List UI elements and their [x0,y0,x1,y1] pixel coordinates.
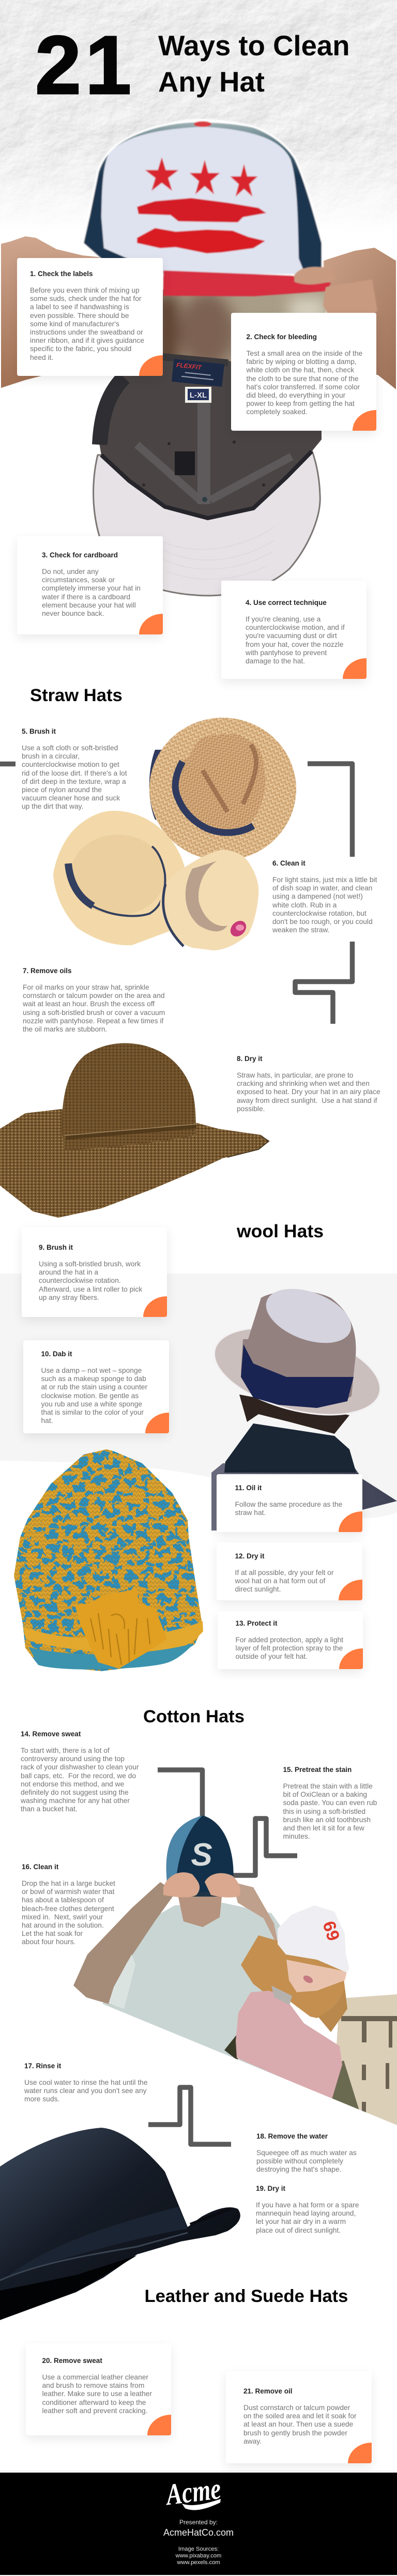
step 17 heading: 17. Rinse it [24,2062,61,2070]
step 5 text: Use a soft cloth or soft-bristled brush in a circular, counterclockwise motion to get rid of the loose dirt. If there's a lot of dirt deep in the texture, wrap a piece of nylon around the vacuum cleaner hose and suck up the dirt that way. [22,744,127,810]
step 6 heading: 6. Clean it [272,859,306,867]
step 19 heading: 19. Dry it [256,2185,285,2192]
step 4 heading: 4. Use correct technique [246,599,327,607]
step 2 text: Test a small area on the inside of the fabric by wiping or blotting a damp, white cloth on the hat, then, check the cloth to be sure that none of the hat's color transferred. If some color did bleed, do everything in your power to keep from getting the hat completely soaked. [246,350,362,416]
card: step 11 [217,1474,362,1532]
step 2 heading: 2. Check for bleeding [246,333,317,341]
photo: woven straw fedora [149,718,296,860]
photo: underside of grey cap with Flexfit label: FLEXFIT [176,361,203,371]
text: step 19 [256,2185,359,2234]
card: step 20 [26,2343,171,2435]
photo: man in blue S cap: S [191,1837,212,1873]
step 16 heading: 16. Clean it [22,1863,58,1871]
step 12 text: If at all possible, dry your felt or wool hat on a hat form out of direct sunlight. [235,1569,333,1593]
title number 21: 21 [35,19,135,111]
step 21 heading: 21. Remove oil [243,2387,293,2395]
step 1 heading: 1. Check the labels [30,270,93,278]
step 8 text: Straw hats, in particular, are prone to cracking and shrinking when wet and then exposed to heat. Dry your hat in an airy place away from direct sunlight. Use a hat stand if possible. [237,1071,380,1113]
step 15 text: Pretreat the stain with a little bit of OxiClean or a baking soda paste. You can even rub this in using a soft-bristled brush like an old toothbrush and then let it sit for a few minutes. [283,1782,377,1840]
background: crumpled paper header [0,0,397,233]
card: step 10 [23,1340,169,1433]
orange corner [353,410,376,431]
step 13 heading: 13. Protect it [236,1619,278,1627]
step 4 text: If you're cleaning, use a counterclockwise motion, and if you're vacuuming dust or dirt from your hat, cover the nozzle with pantyhose to prevent damage to the hat. [246,615,345,665]
photo: black felt hat [0,2128,240,2320]
footer: image sources [176,2546,221,2566]
step 3 text: Do not, under any circumstances, soak or completely immerse your hat in water if there is a cardboard element because your hat will never bounce back. [42,568,141,617]
photo: cream straw hat with pink flower [160,850,258,950]
orange corner [147,2415,171,2435]
heading: Cotton Hats: Cotton Hats [143,1707,245,1726]
orange corner [145,1413,169,1433]
step 1 text: Before you even think of mixing up some suds, check under the hat for a label to see if handwashing is even possible. There should be some kind of manufacturer's instructions under the sweatband or inner ribbon, and if it gives guidance specific to the fabric, you should heed it. [30,286,144,361]
heading: wool Hats: wool Hats [237,1221,324,1241]
background: grey wool section band [0,1274,397,1518]
card: step 21 [226,2371,372,2463]
step 20 text: Use a commercial leather cleaner and brush to remove stains from leather. Make sure to use a leather conditioner afterward to keep the leather soft and prevent cracking. [42,2373,152,2415]
photo: underside of grey cap with Flexfit label: L-XL [190,391,207,400]
footer: image sources: www.pixabay.com [176,2553,221,2559]
step 3 heading: 3. Check for cardboard [42,551,118,559]
heading: Leather and Suede Hats: Leather and Suede Hats [145,2286,348,2306]
text: step 8 [237,1055,380,1113]
card: step 12 [217,1542,362,1600]
orange corner [143,1296,166,1317]
orange corner [139,614,163,634]
title text [158,30,349,98]
step 13 text: For added protection, apply a light layer of felt protection spray to the outside of your felt hat. [236,1636,343,1660]
text: step 17 [24,2062,148,2103]
card: step 9 [22,1227,166,1317]
Acme logo: Acme [163,2472,223,2512]
footer: presented by: Presented by: [179,2519,218,2526]
orange corner [348,2443,372,2463]
step 15 heading: 15. Pretreat the stain [283,1766,352,1774]
photo: man in blue S cap [73,1815,289,2099]
step 18 heading: 18. Remove the water [256,2132,328,2140]
orange corner [343,658,367,679]
title text: Any Hat [158,66,265,98]
photo: pale straw boater [53,811,187,945]
photo: hands holding red white and navy cap [0,121,397,391]
step 6 text: For light stains, just mix a little bit of dish soap in water, and clean using a dampened (not wet!) white cloth. Rub in a counterclockwise rotation, but don't be too rough, or you could weaken the straw. [272,876,377,934]
step 19 text: If you have a hat form or a spare mannequin head laying around, let your hat air dry in a warm place out of direct sunlight. [256,2201,359,2234]
heading: Straw Hats: Straw Hats [30,686,123,705]
step 9 text: Using a soft-bristled brush, work around the hat in a counterclockwise rotation. Afterward, use a lint roller to pick up any stray fibers. [39,1260,142,1301]
step 7 text: For oil marks on your straw hat, sprinkle cornstarch or talcum powder on the area and wait at least an hour. Brush the excess off using a soft-bristled brush or cover a vacuum nozzle with pantyhose. Repeat a few times if the oil marks are stubborn. [23,983,165,1033]
card: step 3 [17,536,163,634]
orange corner [339,1580,362,1600]
step 10 heading: 10. Dab it [41,1350,72,1358]
card: step 1 [17,258,163,376]
step 11 text: Follow the same procedure as the straw hat. [235,1501,342,1517]
photo: underside of grey cap with Flexfit label [94,354,322,596]
step 12 heading: 12. Dry it [235,1552,265,1560]
footer: website: AcmeHatCo.com [163,2527,234,2538]
footer: image sources: Image Sources: [178,2546,219,2552]
card: step 13 [218,1611,363,1669]
orange corner [139,355,163,376]
step 7 heading: 7. Remove oils [23,967,72,975]
footer: image sources: www.pexels.com [177,2559,220,2566]
step 8 heading: 8. Dry it [237,1055,263,1063]
orange corner [339,1648,363,1669]
connector lines [0,764,353,2144]
step 14 text: To start with, there is a lot of controversy around using the top rack of your dishwasher to clean your ball caps, etc. For the record, we do not endorse this method, and we definitely do not suggest using the washing machine for any hat other than a bucket hat. [21,1747,139,1813]
step 10 text: Use a damp – not wet – sponge such as a makeup sponge to dab at or rub the stain using a counter clockwise motion. Be gentle as you rub and use a white sponge that is similar to the color of your hat. [41,1367,147,1425]
photo: woman in white 69 cap, pink sweater, building behind: 69 [318,1919,343,1943]
photo: blue and mustard knit beanie with tassel [14,1449,203,1671]
photo: man from behind wearing pork-pie hat [205,1278,397,1531]
step 17 text: Use cool water to rinse the hat until the water runs clear and you don't see any more suds. [24,2079,148,2103]
step 14 heading: 14. Remove sweat [21,1730,81,1738]
text: step 7 [23,967,165,1033]
text: step 18 [256,2132,357,2173]
step 20 heading: 20. Remove sweat [42,2357,102,2365]
step 9 heading: 9. Brush it [39,1244,73,1251]
photo: brown woven wide-brim hat [0,1043,269,1218]
step 18 text: Squeegee off as much water as possible without completely destroying the hat's shape. [256,2149,357,2173]
step 21 text: Dust cornstarch or talcum powder on the soiled area and let it soak for at least an hour. Then use a suede brush to gently brush the powder away. [243,2404,357,2445]
card: step 2 [231,313,376,431]
photo: woman in white 69 cap, pink sweater, building behind [224,1905,397,2130]
orange corner [339,1511,362,1532]
text: step 16 [22,1863,115,1946]
step 16 text: Drop the hat in a large bucket or bowl of warmish water that has about a tablespoon of bleach-free clothes detergent mixed in. Next, swirl your hat around in the solution. Let the hat soak for about four hours. [22,1880,115,1946]
footer band [0,2471,397,2575]
title text: Ways to Clean [158,30,349,62]
step 5 heading: 5. Brush it [22,728,56,735]
card: step 4 [221,581,367,679]
text: step 15 [283,1766,377,1840]
step 11 heading: 11. Oil it [235,1484,262,1492]
text: step 14 [21,1730,139,1813]
text: step 6 [272,859,377,934]
text: step 5 [22,728,127,810]
